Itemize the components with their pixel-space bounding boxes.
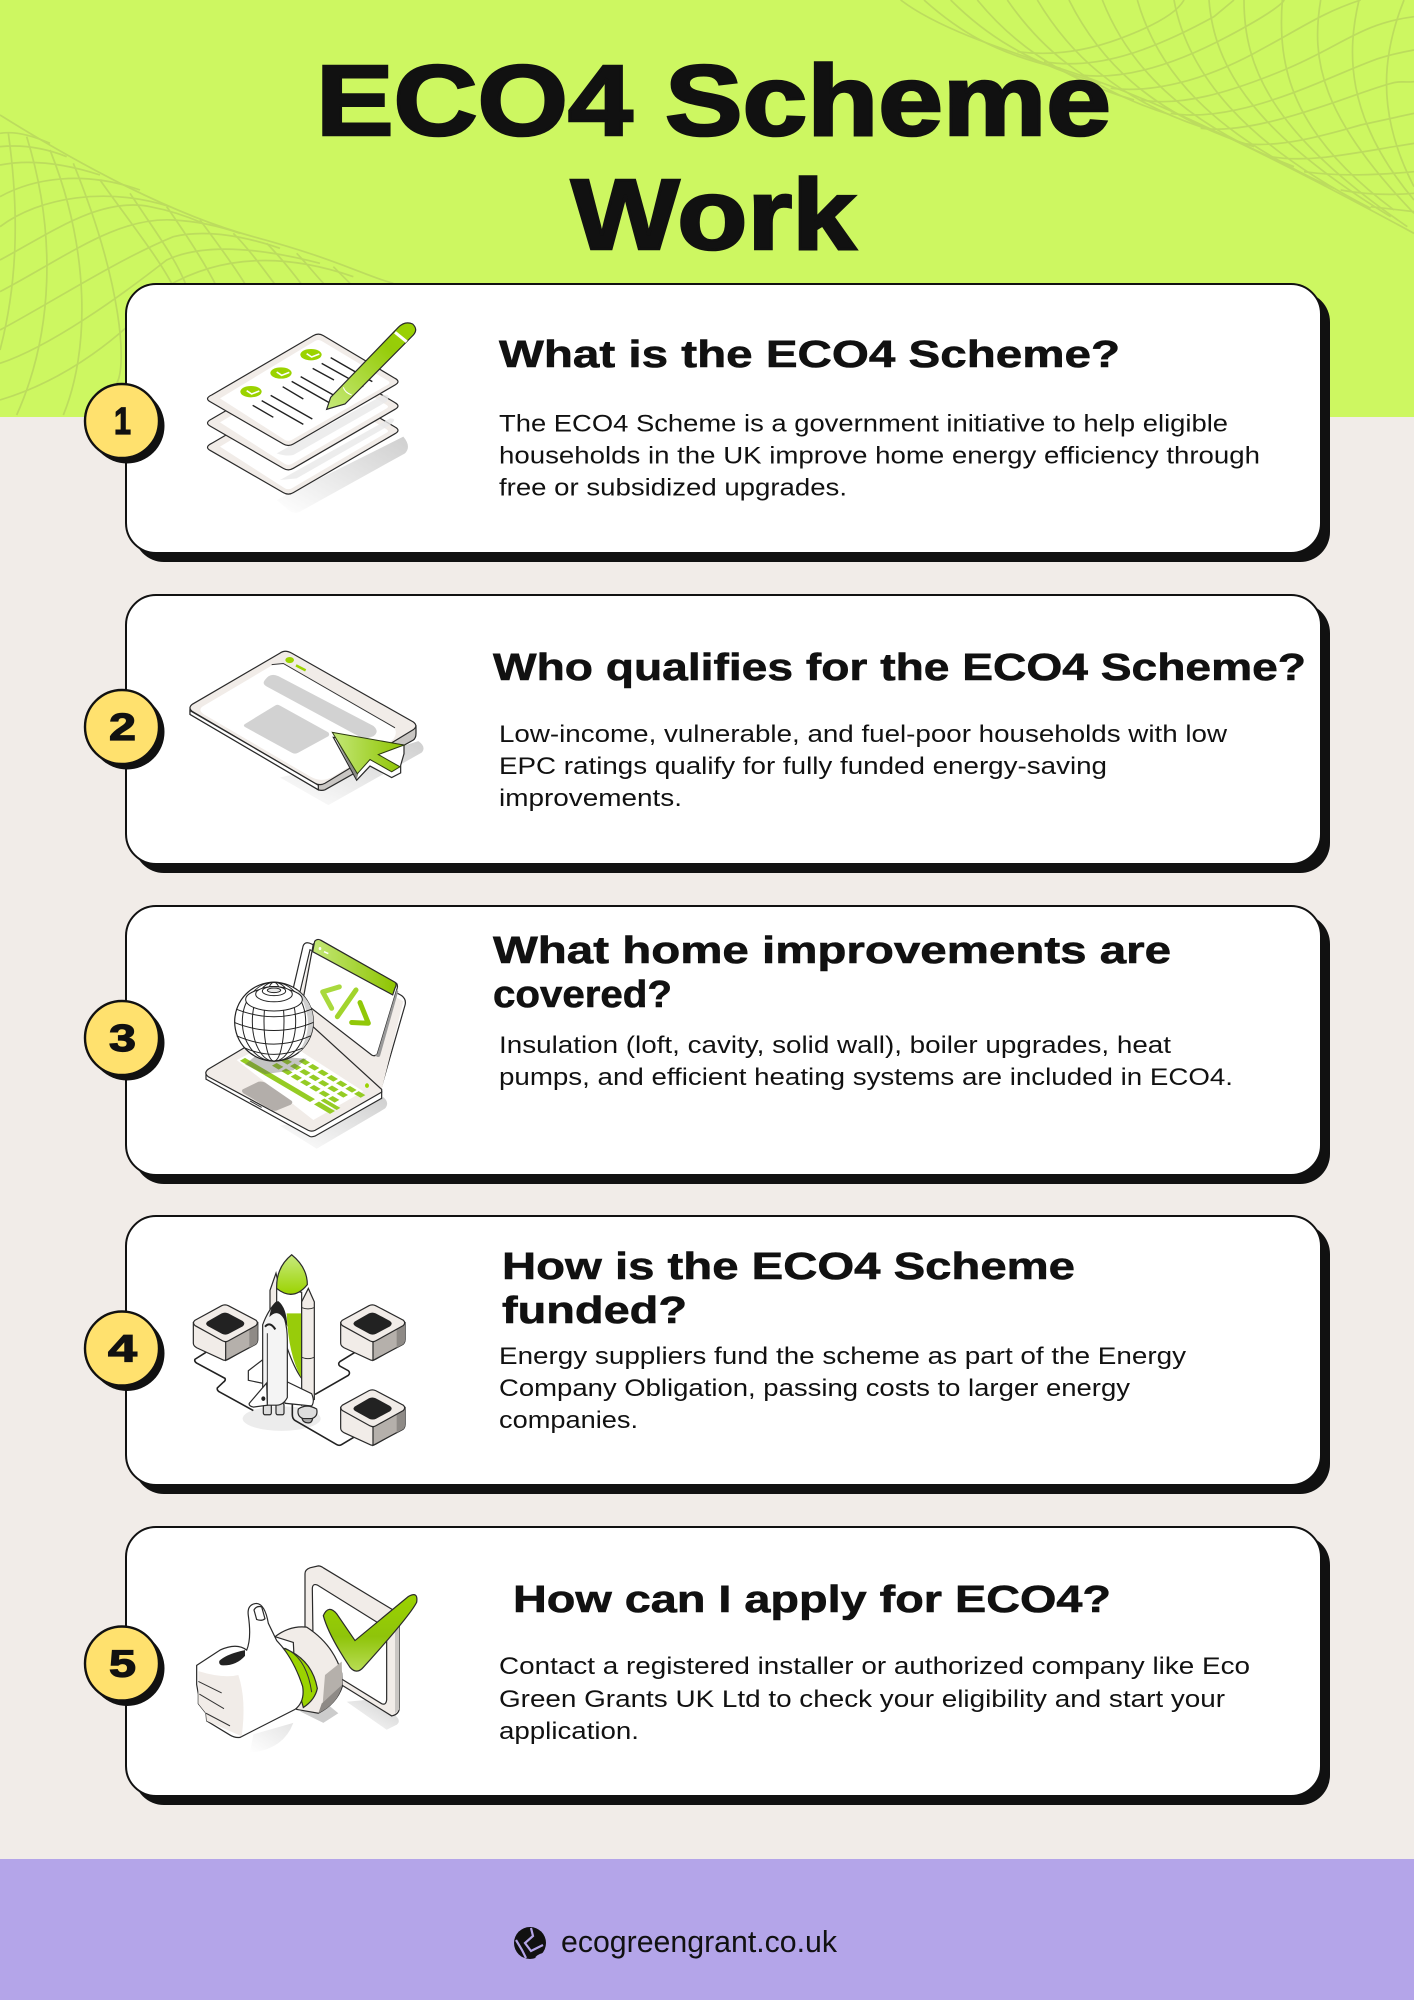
card 4 body text bbox=[499, 1343, 1186, 1434]
card 4 body text: Energy suppliers fund the scheme as part of the Energy bbox=[499, 1343, 1186, 1370]
card 4 heading bbox=[502, 1246, 1075, 1332]
panel: card 1 bbox=[85, 284, 1330, 562]
green header band bbox=[0, 0, 1414, 417]
mesh pattern: left bbox=[0, 115, 393, 415]
number badge 5: 5 bbox=[109, 1644, 136, 1686]
number badge 3 bbox=[85, 1001, 164, 1080]
number badge 2 bbox=[85, 690, 164, 770]
panel: card 2 bbox=[85, 595, 1330, 873]
title: Work bbox=[571, 159, 856, 271]
card 5 body text: Contact a registered installer or authorized company like Eco bbox=[499, 1653, 1250, 1680]
card 3 background bbox=[126, 906, 1330, 1184]
card 5 body text bbox=[499, 1653, 1250, 1745]
card 3 body text bbox=[499, 1032, 1233, 1091]
card 1 body text: households in the UK improve home energy efficiency through bbox=[499, 442, 1260, 470]
icon: rocket with platform blocks bbox=[193, 1255, 405, 1445]
icon: thumbs up with check mark bbox=[197, 1566, 417, 1753]
card 4 heading: How is the ECO4 Scheme bbox=[502, 1246, 1075, 1288]
title: ECO4 Scheme bbox=[316, 45, 1111, 157]
number badge 1 bbox=[85, 384, 164, 464]
number badge 5 bbox=[85, 1626, 164, 1706]
mesh pattern: top right bbox=[901, 0, 1414, 233]
panel: card 5 bbox=[85, 1527, 1330, 1805]
website text: ecogreengrant.co.uk bbox=[561, 1924, 837, 1959]
card 3 body text: pumps, and efficient heating systems are included in ECO4. bbox=[499, 1064, 1233, 1091]
card 3 heading bbox=[493, 930, 1171, 1016]
card 1 background bbox=[126, 284, 1330, 562]
number badge 1: 1 bbox=[114, 401, 131, 443]
card 3 body text: Insulation (loft, cavity, solid wall), boiler upgrades, heat bbox=[499, 1032, 1171, 1059]
card 1 heading: What is the ECO4 Scheme? bbox=[499, 334, 1120, 376]
icon: globe logo bbox=[514, 1927, 546, 1959]
card 4 background bbox=[126, 1216, 1330, 1494]
footer band bbox=[0, 1859, 1414, 2000]
card 1 body text bbox=[499, 410, 1260, 502]
icon: stacked checklist with pen bbox=[208, 323, 416, 513]
card 1 body text: free or subsidized upgrades. bbox=[499, 474, 847, 502]
icon: laptop with globe and code window bbox=[206, 939, 405, 1149]
card 3 heading: What home improvements are bbox=[493, 930, 1171, 972]
number badge 4: 4 bbox=[108, 1328, 137, 1370]
card 2 heading: Who qualifies for the ECO4 Scheme? bbox=[493, 647, 1306, 689]
card 4 heading: funded? bbox=[502, 1290, 687, 1332]
panel: card 3 bbox=[85, 906, 1330, 1184]
number badge 2: 2 bbox=[109, 707, 136, 749]
card 5 background bbox=[126, 1527, 1330, 1805]
footer logo and website bbox=[514, 1924, 837, 1959]
card 3 heading: covered? bbox=[493, 974, 672, 1016]
card 5 heading: How can I apply for ECO4? bbox=[513, 1579, 1111, 1621]
card 2 body text: EPC ratings qualify for fully funded energy-saving bbox=[499, 753, 1107, 780]
card 2 body text bbox=[499, 721, 1228, 812]
card 4 body text: companies. bbox=[499, 1407, 638, 1434]
card 2 body text: improvements. bbox=[499, 785, 682, 812]
card 5 body text: Green Grants UK Ltd to check your eligibility and start your bbox=[499, 1686, 1225, 1713]
card 4 body text: Company Obligation, passing costs to larger energy bbox=[499, 1375, 1130, 1402]
icon: tablet with cursor bbox=[190, 651, 424, 805]
card 1 body text: The ECO4 Scheme is a government initiative to help eligible bbox=[499, 410, 1228, 438]
panel: card 4 bbox=[85, 1216, 1330, 1494]
card 2 background bbox=[126, 595, 1330, 873]
card 5 body text: application. bbox=[499, 1718, 639, 1745]
number badge 4 bbox=[85, 1312, 164, 1391]
title bbox=[316, 45, 1111, 271]
card 2 body text: Low-income, vulnerable, and fuel-poor households with low bbox=[499, 721, 1228, 748]
number badge 3: 3 bbox=[109, 1018, 136, 1060]
